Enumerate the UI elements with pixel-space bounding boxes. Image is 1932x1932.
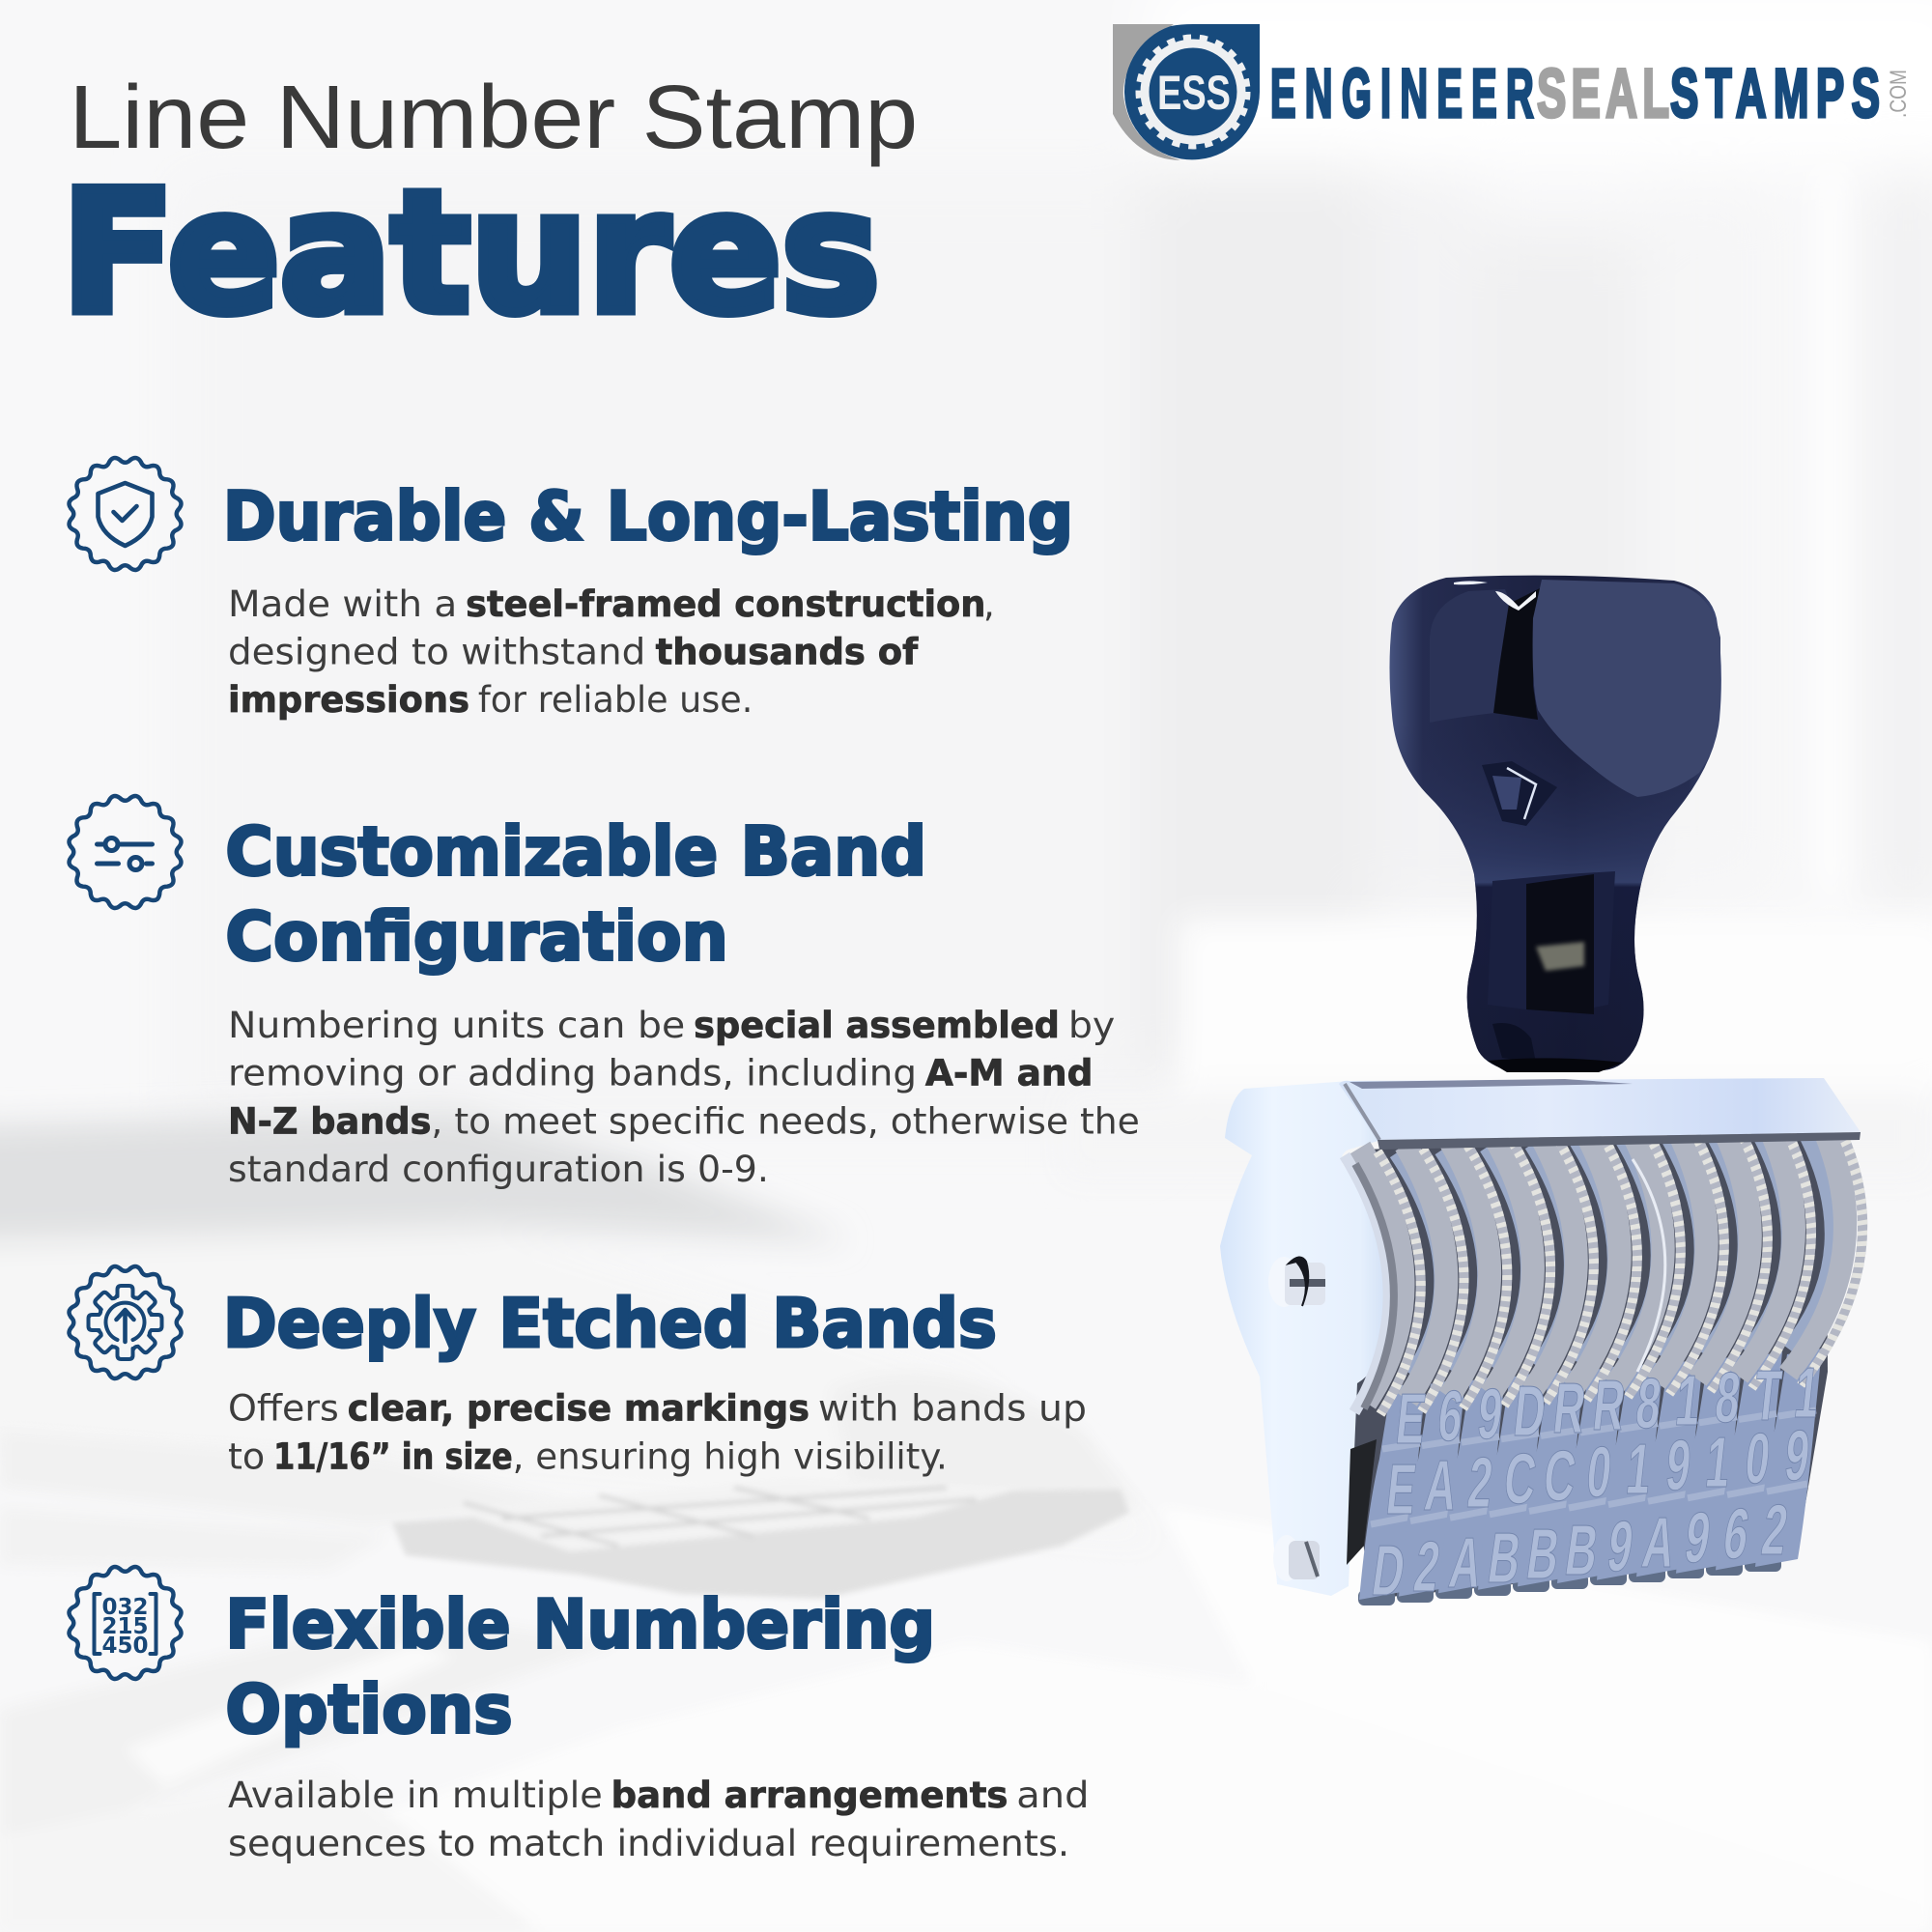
band letters: 9 [1781,1416,1813,1495]
curved band tops [1360,1119,1881,1414]
text block: and [1016,1774,1090,1816]
text block: thousands of [656,630,919,672]
text block: Available in multiple [228,1774,603,1816]
stamp silver side strip [1345,1155,1394,1412]
band letters: 6 [1435,1377,1466,1456]
text block: sequences to match individual requirements. [228,1822,1069,1864]
band letters [1368,1353,1823,1611]
icon: number grid badge: 032 [102,1595,149,1620]
logo wordmark: .COM [1886,70,1912,118]
handle reflection [1482,761,1557,826]
icon: shield badge [63,452,187,576]
icon: number grid badge: 215 [102,1614,149,1639]
band letters: 1 [1672,1361,1704,1440]
heading [225,813,926,977]
band letters: D [1510,1372,1549,1451]
title: Line Number Stamp: Line Number Stamp [69,67,918,167]
band letters: B [1484,1519,1525,1599]
text block: , [983,582,995,625]
logo emblem: ESS [1157,66,1231,120]
text block: N-Z bands [228,1099,431,1142]
band letters: 2 [1409,1527,1445,1607]
panel: durable and long-lasting [223,478,1073,721]
band letters: 9 [1662,1426,1694,1505]
text block [228,1387,1087,1477]
stamp rubber bands [1358,1119,1881,1611]
heading: Flexible Numbering [225,1585,935,1663]
stamp band interior [1349,1138,1828,1599]
icon: number grid badge [63,1561,187,1685]
text block: Numbering units can be [228,1004,685,1046]
handle neck dark patch [1488,871,1615,1009]
band letters: 1 [1702,1423,1734,1502]
panel: deeply etched bands [223,1285,1087,1477]
logo: Engineer Seal Stamps [1113,24,1912,160]
band letters: 1 [1791,1353,1823,1433]
stamp product photo [1220,576,1881,1611]
text block: impressions [228,678,469,721]
text block: Made with a [228,582,457,625]
heading: Deeply Etched Bands [223,1285,997,1363]
heading: Customizable Band [225,813,926,892]
text block: clear, precise markings [348,1387,810,1430]
band letters: 6 [1719,1494,1754,1575]
band letters: 1 [1623,1430,1655,1509]
logo wordmark: SEAL [1537,55,1669,131]
text block: for reliable use. [478,678,753,721]
text block: with bands up [818,1387,1087,1430]
heading: Options [225,1670,513,1748]
band letters: C [1500,1439,1540,1519]
panel: customizable band configuration [225,813,1140,1190]
stamp frame top pin [1268,1257,1325,1307]
stamp frame bottom pin [1273,1535,1320,1581]
text block: band arrangements [611,1774,1008,1816]
text block: 11/16” in size [273,1435,513,1477]
heading: Durable & Long-Lasting [223,478,1073,556]
lower band blocks [1358,1349,1822,1605]
text block [228,582,995,721]
heading: Features: Features [62,155,880,350]
band letters: 0 [1583,1433,1615,1512]
band letters: 9 [1474,1375,1506,1454]
icon: sliders badge [63,790,187,914]
band letters: B [1561,1511,1603,1591]
logo emblem [1113,24,1260,160]
text block: special assembled [694,1004,1060,1046]
handle black strip [1493,585,1546,720]
band letters: 9 [1680,1498,1716,1578]
band letters: A [1421,1446,1461,1525]
text block: steel-framed construction [466,582,985,625]
handle foot [1492,1023,1536,1063]
text block [228,1774,1090,1864]
heading [225,1585,935,1748]
icon: number grid badge: 450 [102,1634,149,1659]
band letters: E [1393,1379,1430,1459]
heading: Configuration [225,898,728,977]
panel: flexible numbering options [225,1585,1090,1864]
stamp frame side plate [1220,1081,1395,1596]
stamp handle [1389,576,1721,1072]
stamp inner dark gap [1347,1439,1377,1565]
band letters: A [1638,1503,1680,1583]
band letters: 8 [1712,1358,1744,1437]
stamp frame top bar [1339,1078,1861,1150]
text block: Offers [228,1387,339,1430]
text block: by [1068,1004,1115,1046]
text block: standard configuration is 0-9. [228,1148,769,1190]
band letters: 2 [1757,1491,1793,1571]
logo wordmark: ENGINEER [1270,56,1534,132]
band letters: 0 [1742,1419,1774,1498]
handle flat face [1533,580,1720,797]
text block: to [228,1435,265,1477]
logo wordmark: STAMPS [1670,55,1880,132]
handle highlights [1454,582,1488,584]
band letters: 9 [1603,1507,1638,1587]
band letters: A [1445,1523,1487,1604]
band letters: D [1368,1531,1409,1611]
text block: , ensuring high visibility. [513,1435,948,1477]
title block [62,67,918,350]
silver center ring [1633,1159,1665,1372]
band letters: 8 [1633,1364,1664,1443]
band letters: R [1589,1366,1629,1445]
band letters: C [1540,1436,1579,1516]
feature text [223,478,1140,1864]
text block: , to meet specific needs, otherwise the [431,1099,1140,1142]
handle left panel [1430,589,1513,723]
icon: gear arrow badge [63,1261,187,1384]
logo wordmark [1270,55,1912,132]
band letters: B [1522,1515,1564,1595]
band letters: E [1383,1450,1420,1529]
text block: removing or adding bands, including [228,1052,917,1094]
text block: A-M and [925,1052,1093,1094]
text block [228,1004,1140,1190]
band letters: 2 [1464,1443,1496,1522]
text block: designed to withstand [228,630,645,672]
band letters: T [1750,1356,1785,1435]
band letters: R [1549,1369,1589,1448]
